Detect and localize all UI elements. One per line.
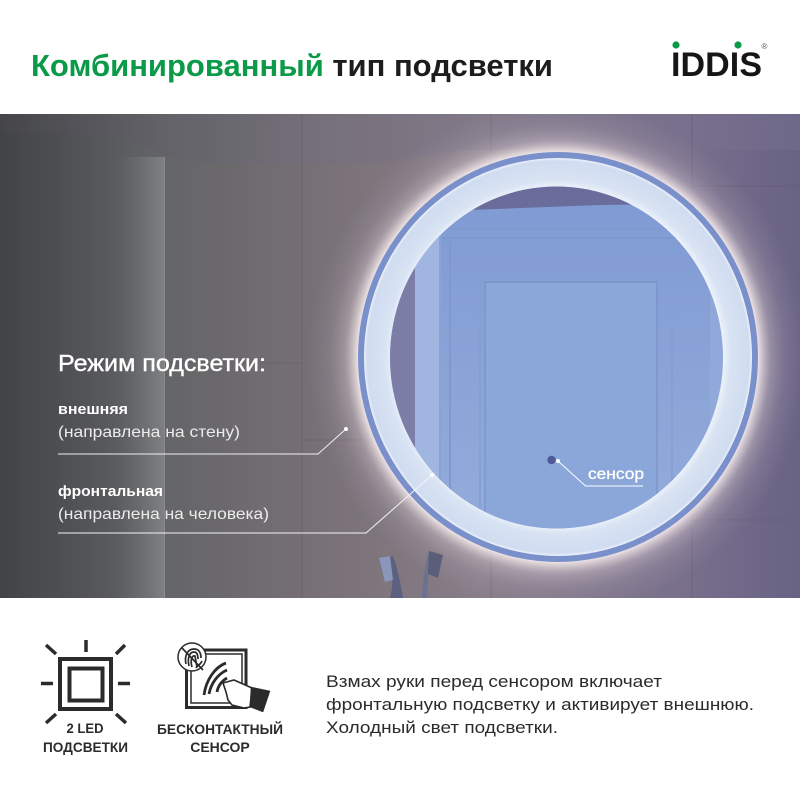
icon: touchless sensor (178, 643, 270, 712)
callout: внешняя: (направлена на стену) (58, 424, 240, 441)
callout: внешняя: внешняя (58, 402, 128, 418)
logo: IDDIS: ® (762, 42, 768, 51)
callout: фронтальная: фронтальная (58, 484, 163, 500)
overlay heading: mode: Режим подсветки: (58, 350, 266, 376)
panel: bathroom photo (0, 101, 800, 613)
glass partition strip (134, 157, 165, 598)
callout: фронтальная: (направлена на человека) (58, 506, 269, 523)
toothbrushes (379, 551, 443, 598)
label: touchless sensor: БЕСКОНТАКТНЫЙ (157, 720, 283, 737)
callout: внешняя (58, 402, 348, 454)
sensor dot (547, 456, 556, 464)
description text: Взмах руки перед сенсором включает (326, 673, 663, 691)
label: 2 LED: 2 LED (66, 720, 104, 736)
title: Комбинированный тип подсветки (31, 48, 553, 83)
callout: сенсор: сенсор (588, 466, 644, 483)
description text: фронтальную подсветку и активирует внешнюю. (326, 696, 754, 714)
mirror glow on wall (322, 119, 795, 594)
wall background (0, 114, 800, 598)
icon: 2 LED (41, 640, 130, 723)
description text: Холодный свет подсветки. (326, 719, 558, 737)
label: touchless sensor: СЕНСОР (190, 739, 250, 755)
callout: фронтальная (58, 473, 434, 533)
mirror frosted light ring (364, 158, 752, 556)
label: 2 LED: ПОДСВЕТКИ (43, 739, 128, 755)
wall tile joints (242, 114, 800, 598)
logo: IDDIS: IDDIS (671, 46, 762, 84)
ceiling shade (0, 114, 800, 166)
mirror outer rim (358, 152, 758, 562)
callout: сенсор (556, 459, 644, 486)
mirror glass with door reflection (385, 180, 731, 538)
